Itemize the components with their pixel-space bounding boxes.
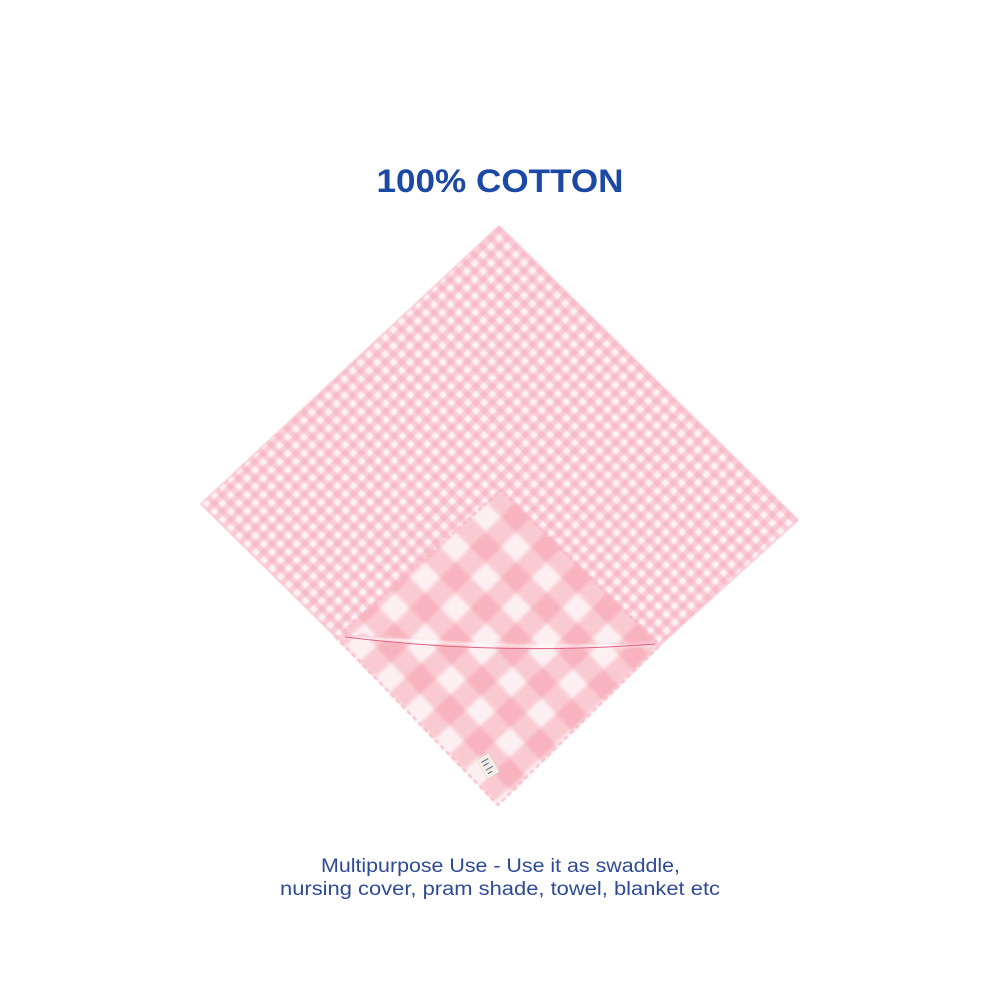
caption: nursing cover, pram shade, towel, blanket etc xyxy=(280,879,720,900)
caption xyxy=(280,856,720,900)
folded flap with large gingham xyxy=(343,490,657,645)
cloth body with small gingham xyxy=(201,226,798,645)
flap hem stitching xyxy=(343,490,657,642)
sewn label xyxy=(476,753,500,779)
title: 100% COTTON xyxy=(376,163,624,199)
lower corner with large gingham xyxy=(335,636,660,805)
caption: Multipurpose Use - Use it as swaddle, xyxy=(321,856,680,877)
corner hem xyxy=(335,636,660,805)
cloth: folded gingham muslin xyxy=(201,226,798,805)
fold line xyxy=(345,637,655,649)
